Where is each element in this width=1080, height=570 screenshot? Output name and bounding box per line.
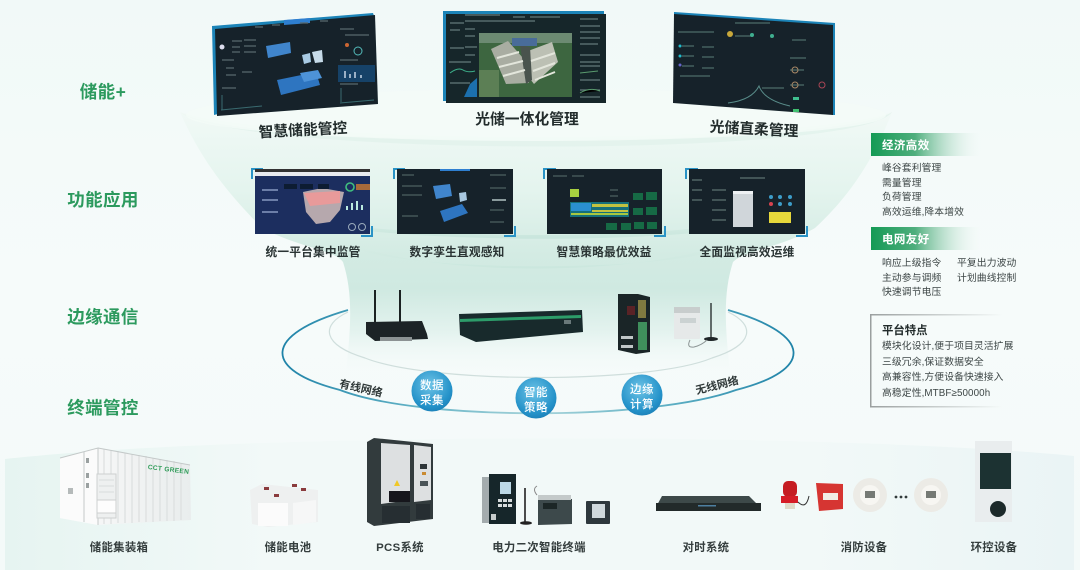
device: fire equipment: [781, 478, 948, 512]
caption: 统一平台集中监管: 统一平台集中监管: [265, 245, 361, 259]
panel: 经济高效: 峰谷套利管理: [882, 161, 941, 174]
base platform: [5, 438, 1074, 570]
caption: 智慧储能管控: 智慧储能管控: [258, 119, 348, 141]
app screen: 统一平台集中监管: [252, 169, 372, 236]
panel: 经济高效: 需量管理: [882, 176, 922, 189]
network ring: outer: [282, 310, 794, 413]
panel: 经济高效: 负荷管理: [882, 190, 922, 203]
caption: 对时系统: 对时系统: [683, 540, 730, 554]
panel: 经济高效: 高效运维,降本增效: [882, 205, 964, 218]
caption: 环控设备: 环控设备: [971, 540, 1018, 554]
panel: 电网友好: 平复出力波动: [957, 256, 1016, 269]
device: energy storage container: CCT GREEN: [147, 464, 189, 476]
screen: 光储一体化管理: [443, 11, 606, 103]
device: energy storage container: [60, 448, 191, 525]
level label: 终端管控: 终端管控: [67, 398, 139, 418]
panel: 电网友好: [871, 227, 1016, 298]
panel: 电网友好: 快速调节电压: [882, 285, 941, 298]
badge: 边缘计算: [622, 374, 662, 416]
device: time sync unit: [656, 496, 761, 511]
badge: 智能策略: 策略: [524, 400, 548, 414]
caption: 数字孪生直观感知: 数字孪生直观感知: [409, 245, 505, 259]
level label: 储能+: 储能+: [80, 82, 126, 102]
label: 无线网络: 无线网络: [694, 373, 740, 397]
panel: 平台特点: 平台特点: [882, 323, 928, 337]
level label: 功能应用: 功能应用: [67, 190, 139, 210]
device: 4G router: [366, 290, 428, 341]
panel: 平台特点: 三级冗余,保证数据安全: [882, 355, 984, 368]
panel: 经济高效: [871, 133, 981, 218]
badge: 数据采集: [412, 370, 452, 412]
device: PCS cabinet: [367, 438, 433, 526]
device: storage battery: [250, 484, 318, 527]
caption: 消防设备: 消防设备: [841, 540, 888, 554]
badge: 边缘计算: 边缘: [630, 382, 654, 396]
device: environment controller: [975, 441, 1012, 522]
panel: 平台特点: [870, 314, 1014, 408]
panel: 平台特点: 高兼容性,方便设备快速接入: [882, 370, 1004, 383]
caption: 储能电池: 储能电池: [265, 540, 312, 554]
device: gateway rack: [459, 310, 583, 342]
device: secondary smart terminals: [482, 474, 610, 525]
screen: 智慧储能管控: [212, 13, 378, 116]
app screen: 智慧策略最优效益: [544, 169, 665, 236]
caption: 智慧策略最优效益: 智慧策略最优效益: [556, 245, 652, 259]
device: wireless module: [674, 303, 718, 347]
badge: 智能策略: 智能: [524, 385, 548, 399]
badge: 数据采集: 采集: [420, 393, 444, 407]
caption: PCS系统: PCS系统: [376, 540, 424, 554]
caption: 光储一体化管理: 光储一体化管理: [475, 110, 579, 128]
level label: 边缘通信: 边缘通信: [67, 307, 139, 327]
badge: 智能策略: [516, 378, 556, 418]
screen: 光储直柔管理: [673, 12, 835, 115]
network ring: inner: [329, 312, 747, 378]
panel: 平台特点: 模块化设计,便于项目灵活扩展: [882, 339, 1014, 352]
app screen: 数字孪生直观感知: [394, 169, 515, 236]
caption: 全面监视高效运维: 全面监视高效运维: [699, 245, 795, 259]
caption: 储能集装箱: 储能集装箱: [90, 540, 148, 554]
funnel background: [180, 89, 892, 372]
panel: 平台特点: 高稳定性,MTBF≥50000h: [882, 386, 990, 399]
panel: 电网友好: 响应上级指令: [882, 256, 941, 269]
panel: 电网友好: 主动参与调频: [882, 271, 941, 284]
panel: 电网友好: 电网友好: [882, 232, 930, 246]
device: edge controller: [618, 294, 650, 354]
caption: 电力二次智能终端: 电力二次智能终端: [492, 540, 586, 554]
caption: 光储直柔管理: 光储直柔管理: [709, 118, 799, 140]
badge: 边缘计算: 计算: [630, 397, 654, 411]
app screen: 全面监视高效运维: [686, 169, 807, 236]
panel: 电网友好: 计划曲线控制: [957, 271, 1016, 284]
badge: 数据采集: 数据: [420, 378, 444, 392]
label: 有线网络: 有线网络: [338, 376, 384, 400]
panel: 经济高效: 经济高效: [882, 138, 930, 152]
